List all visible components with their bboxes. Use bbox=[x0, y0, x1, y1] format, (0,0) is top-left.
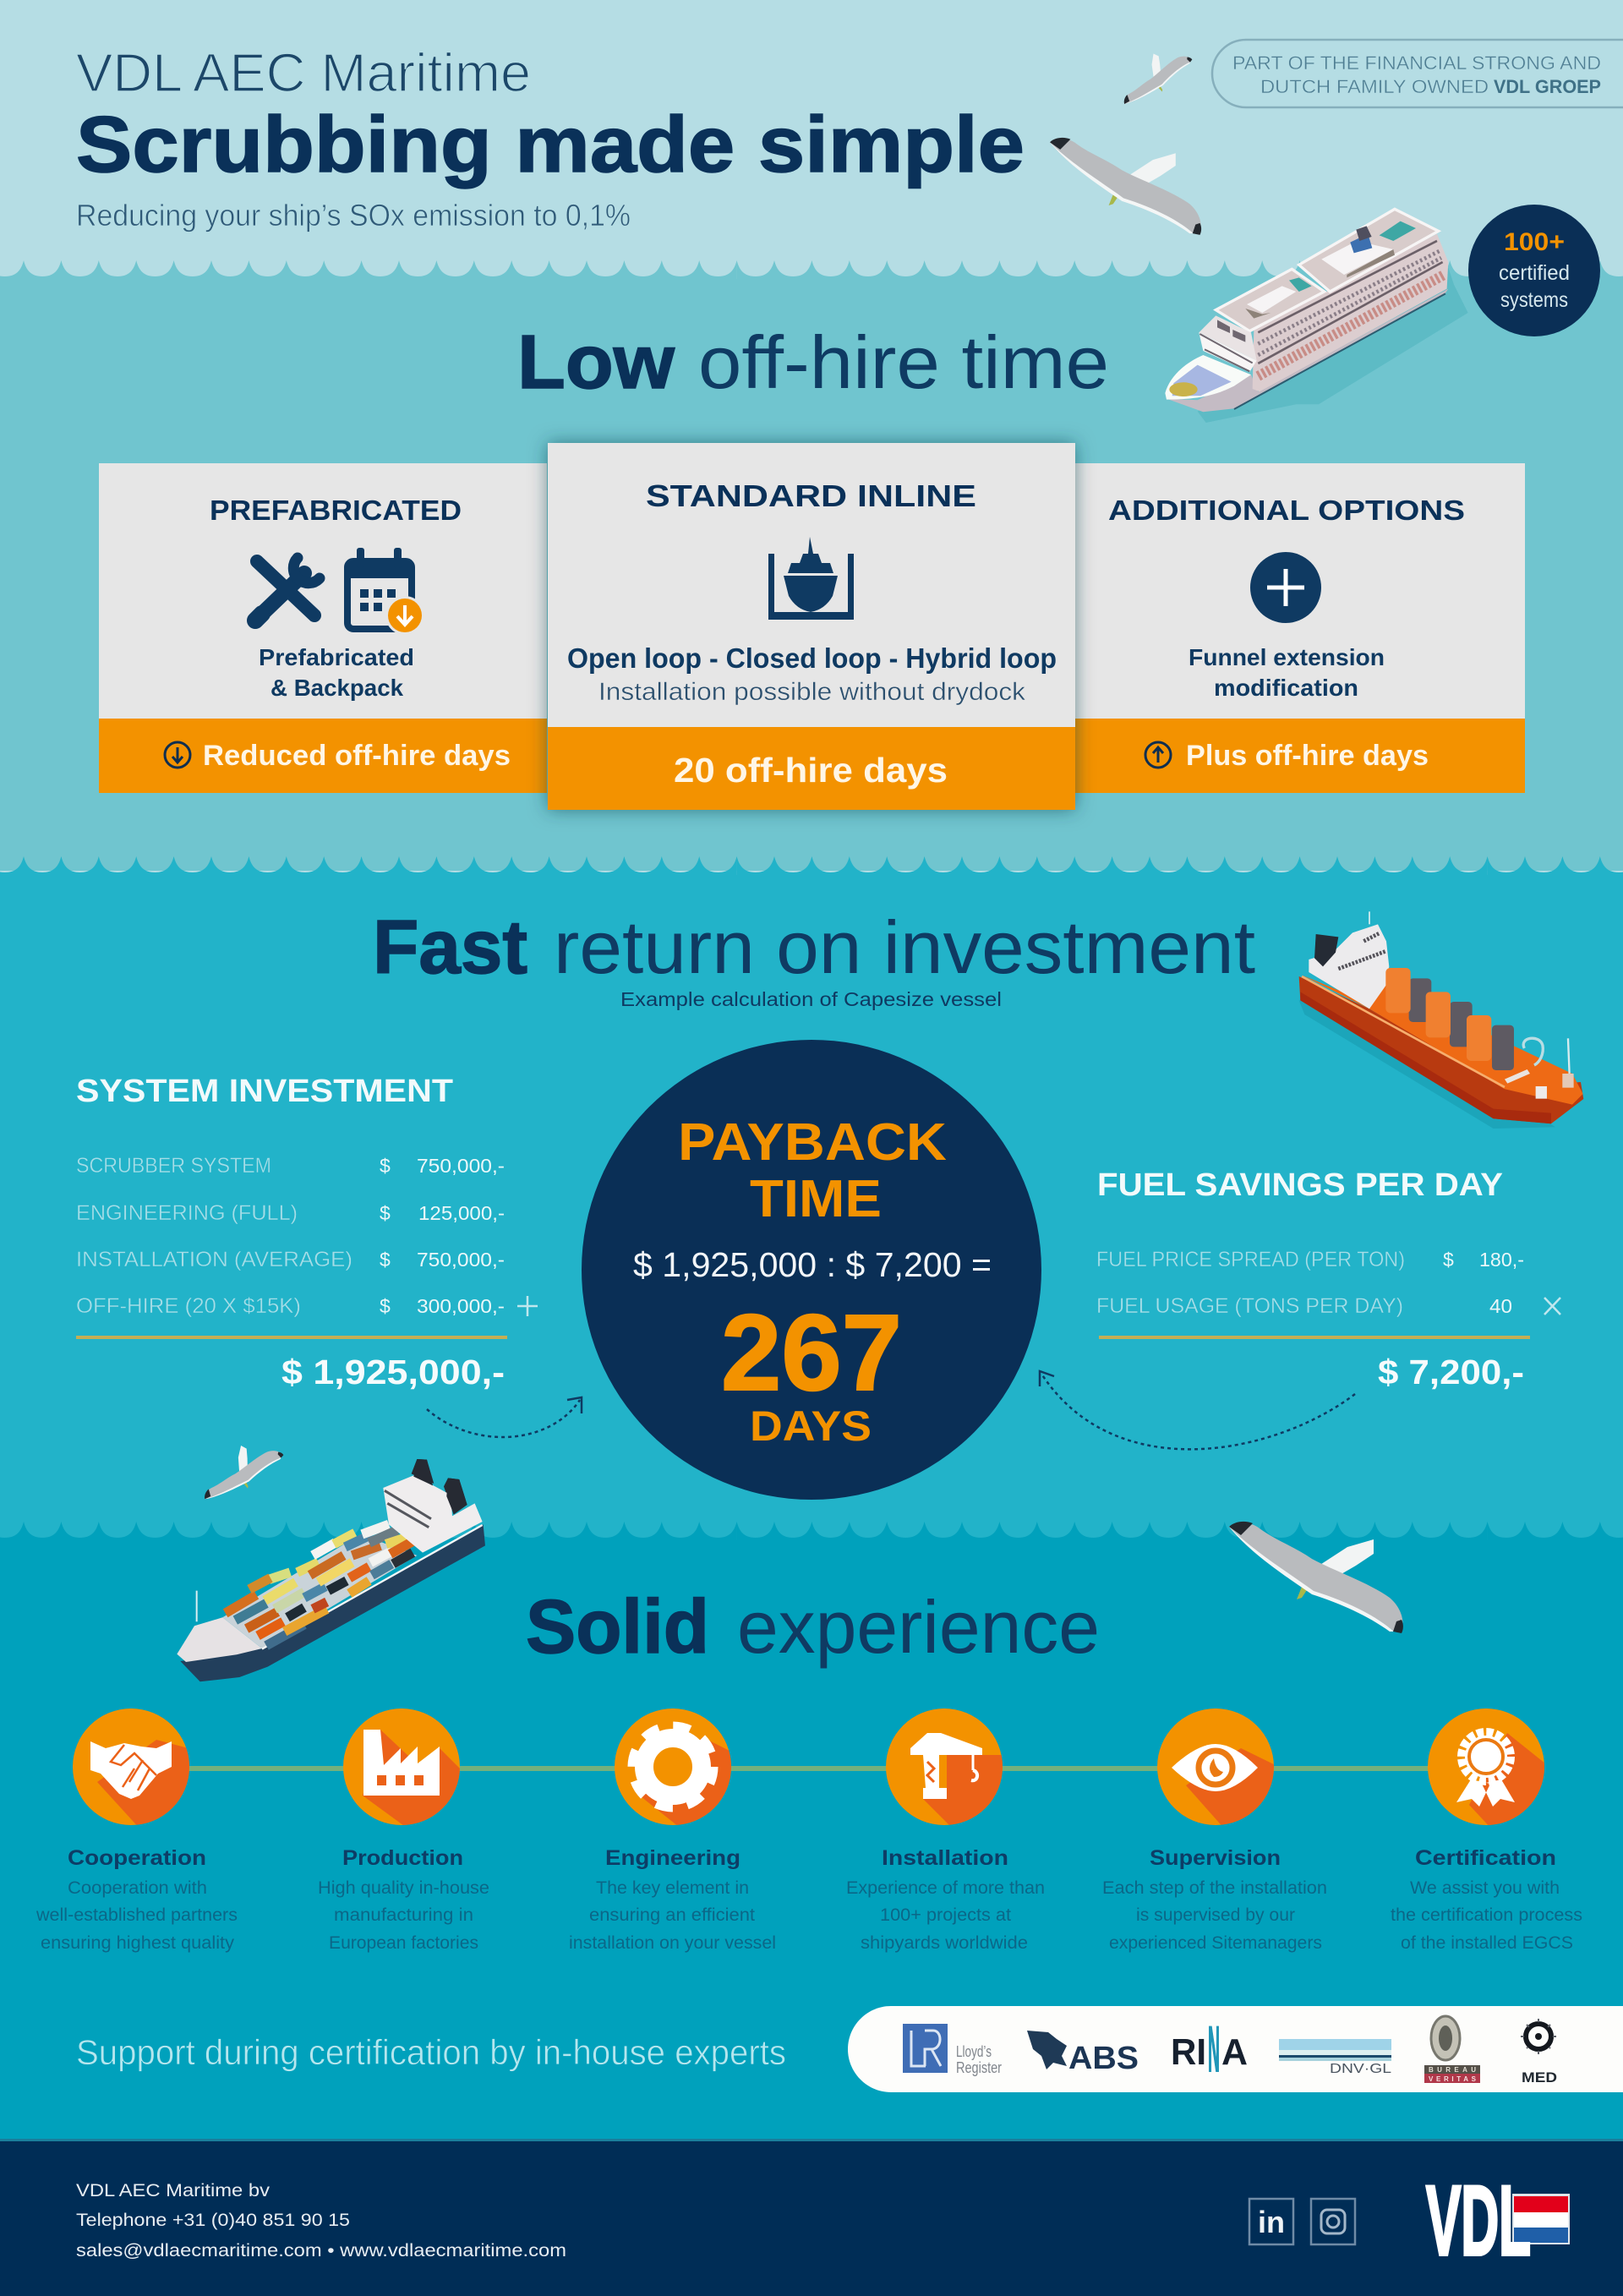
rows: cost values: $ bbox=[380, 1249, 391, 1271]
panel text: funnel extension modification bbox=[1189, 644, 1385, 701]
main title: Scrubbing made simple bbox=[76, 100, 1025, 189]
logo: RINA: RI bbox=[1171, 2031, 1206, 2073]
total: system investment: $ 1,925,000,- bbox=[281, 1353, 505, 1391]
footer contact text bbox=[76, 2181, 566, 2260]
panel heading: prefabricated: PREFABRICATED bbox=[210, 495, 462, 526]
logo: DNV GL: DNV·GL bbox=[1330, 2062, 1391, 2076]
heading: Solid experience: Solid bbox=[526, 1585, 709, 1670]
multiply sign bbox=[1544, 1298, 1560, 1315]
callout pill: part of VDL Groep: PART OF THE FINANCIAL STRONG AND bbox=[1232, 52, 1601, 74]
step title and description bbox=[36, 1846, 238, 1953]
step title and description: Certification bbox=[1415, 1846, 1556, 1870]
step title and description: shipyards worldwide bbox=[861, 1933, 1028, 1953]
rows: cost labels bbox=[76, 1154, 352, 1318]
step: engineering bbox=[569, 1708, 776, 1953]
step title and description: installation on your vessel bbox=[569, 1933, 776, 1953]
label: plus off-hire days: Plus off-hire days bbox=[1186, 740, 1429, 772]
calculation: $ 1,925,000 : $ 7,200 = bbox=[633, 1245, 992, 1284]
logo: Bureau Veritas: BUREAU bbox=[1429, 2066, 1476, 2074]
icon: factory bbox=[343, 1708, 465, 1830]
step title and description: High quality in-house bbox=[318, 1878, 489, 1898]
rows: fuel values bbox=[1443, 1249, 1524, 1317]
payback heading: PAYBACK bbox=[678, 1113, 947, 1172]
illustration: cruise ship bbox=[1165, 209, 1468, 423]
badge: 100+ certified systems: systems bbox=[1500, 288, 1568, 312]
step title and description: Experience of more than bbox=[846, 1878, 1045, 1898]
heading: Fast return on investment: Fast bbox=[373, 905, 527, 990]
arrow: investment to payback bbox=[427, 1397, 582, 1437]
footer bbox=[0, 2139, 1623, 2296]
logo: Bureau Veritas: VERITAS bbox=[1429, 2075, 1477, 2083]
logo: Lloyd's Register bbox=[903, 2024, 1002, 2076]
callout pill: part of VDL Groep: VDL GROEP bbox=[1494, 76, 1601, 97]
result unit: days: DAYS bbox=[750, 1402, 872, 1450]
panel heading: standard inline: STANDARD INLINE bbox=[646, 478, 976, 513]
panel text: installation note: Installation possible without drydock bbox=[598, 678, 1026, 706]
step title and description: Cooperation bbox=[68, 1846, 206, 1870]
footer contact text: sales@vdlaecmaritime.com • www.vdlaecmaritime.com bbox=[76, 2241, 566, 2260]
step title and description: ensuring an efficient bbox=[589, 1905, 755, 1925]
heading: Low off-hire time: off-hire time bbox=[698, 320, 1109, 404]
step: certification bbox=[1391, 1708, 1582, 1953]
rows: fuel labels: FUEL PRICE SPREAD (PER TON) bbox=[1096, 1248, 1405, 1271]
footer contact text: VDL AEC Maritime bv bbox=[76, 2181, 270, 2200]
panel text: funnel extension modification: modification bbox=[1214, 675, 1358, 701]
heading: Low off-hire time bbox=[517, 320, 1109, 405]
panel: prefabricated bbox=[99, 463, 547, 793]
logo: Lloyd's Register: Lloyd’s bbox=[956, 2043, 992, 2060]
rows: cost values: $ bbox=[380, 1295, 391, 1317]
step: installation bbox=[846, 1708, 1045, 1953]
panel: fuel savings table bbox=[1096, 1167, 1560, 1391]
icon: small seagull lower left bbox=[203, 1430, 284, 1522]
step title and description: Each step of the installation bbox=[1102, 1878, 1327, 1898]
step title and description: of the installed EGCS bbox=[1401, 1933, 1573, 1953]
heading: Fast return on investment: return on investment bbox=[554, 905, 1255, 989]
rows: cost values: 300,000,- bbox=[417, 1295, 505, 1317]
rows: cost labels: INSTALLATION (AVERAGE) bbox=[76, 1248, 352, 1271]
footer contact text: Telephone +31 (0)40 851 90 15 bbox=[76, 2211, 350, 2230]
step title and description: Production bbox=[342, 1846, 463, 1870]
rows: fuel values: 40 bbox=[1489, 1295, 1512, 1317]
process connector line bbox=[131, 1766, 1486, 1771]
heading: Solid experience: experience bbox=[737, 1585, 1100, 1669]
panel: standard inline bbox=[548, 443, 1075, 810]
panel text: prefabricated and backpack bbox=[259, 644, 414, 701]
rows: cost values: 125,000,- bbox=[418, 1202, 505, 1224]
step: production bbox=[318, 1708, 489, 1953]
logo: Bureau Veritas bbox=[1424, 2016, 1480, 2083]
icon: down arrow circle bbox=[165, 742, 190, 768]
icon: up arrow circle bbox=[1145, 742, 1171, 768]
company name: VDL AEC Maritime bbox=[76, 42, 531, 103]
rows: cost labels: OFF-HIRE (20 X $15K) bbox=[76, 1294, 301, 1318]
rows: fuel values: $ bbox=[1443, 1249, 1454, 1271]
label: 20 off-hire days: 20 off-hire days bbox=[674, 751, 948, 790]
step title and description: European factories bbox=[329, 1933, 478, 1953]
panel text: prefabricated and backpack: Prefabricated bbox=[259, 644, 414, 670]
header title block bbox=[76, 42, 1025, 232]
icon: large seagull top bbox=[1050, 138, 1201, 235]
logo: RINA: N bbox=[1208, 2014, 1220, 2086]
step title and description: The key element in bbox=[596, 1878, 749, 1898]
heading: Low off-hire time: Low bbox=[517, 320, 675, 405]
icon: large seagull lower right bbox=[1229, 1522, 1403, 1633]
icon: crane bbox=[886, 1708, 1008, 1830]
icon: eye bbox=[1157, 1708, 1279, 1830]
result: 267: 267 bbox=[721, 1293, 902, 1413]
step title and description bbox=[1391, 1846, 1582, 1953]
illustration: tanker ship bbox=[1299, 911, 1583, 1129]
panel heading: system investment: SYSTEM INVESTMENT bbox=[76, 1074, 453, 1109]
icon: ship in drydock bbox=[768, 537, 854, 620]
callout pill: part of VDL Groep bbox=[1212, 40, 1623, 107]
background: second water band with scalloped waves bbox=[0, 856, 1623, 1543]
logo: MED wheel mark bbox=[1521, 2019, 1557, 2086]
step title and description: is supervised by our bbox=[1136, 1905, 1295, 1925]
rows: cost values: 750,000,- bbox=[417, 1249, 505, 1271]
panel text: loop types: Open loop - Closed loop - Hybrid loop bbox=[567, 642, 1057, 674]
text: support during certification: Support during certification by in-house experts bbox=[76, 2032, 786, 2072]
icon: small seagull top bbox=[1123, 40, 1193, 122]
badge: 100+ certified systems: certified bbox=[1499, 261, 1570, 285]
rows: cost values: 750,000,- bbox=[417, 1155, 505, 1177]
illustration: container ship bbox=[177, 1459, 485, 1681]
step: supervision bbox=[1102, 1708, 1327, 1953]
rows: cost values: $ bbox=[380, 1155, 391, 1177]
rows: cost labels: SCRUBBER SYSTEM bbox=[76, 1154, 271, 1178]
panel heading: additional options: ADDITIONAL OPTIONS bbox=[1108, 495, 1465, 526]
icon: linkedin: in bbox=[1258, 2205, 1285, 2239]
rows: fuel labels bbox=[1096, 1248, 1405, 1318]
logo: RINA bbox=[1171, 2014, 1248, 2086]
icon: handshake bbox=[73, 1708, 194, 1830]
step title and description: well-established partners bbox=[36, 1905, 238, 1925]
rows: cost values: $ bbox=[380, 1202, 391, 1224]
badge: 100+ certified systems bbox=[1468, 205, 1600, 336]
logo: DNV GL bbox=[1279, 2039, 1391, 2076]
payback heading: TIME bbox=[750, 1170, 882, 1228]
icon: instagram bbox=[1311, 2199, 1355, 2244]
badge: payback time circle bbox=[582, 1040, 1041, 1500]
subheading: example calculation: Example calculation of Capesize vessel bbox=[620, 988, 1002, 1010]
step title and description: manufacturing in bbox=[334, 1905, 473, 1925]
payback heading bbox=[678, 1113, 947, 1228]
heading: Solid experience bbox=[526, 1585, 1100, 1670]
badge: 100+ certified systems: 100+ bbox=[1504, 228, 1565, 256]
step title and description: the certification process bbox=[1391, 1905, 1582, 1925]
panel: additional options bbox=[1075, 463, 1525, 793]
step title and description bbox=[846, 1846, 1045, 1953]
rows: cost labels: ENGINEERING (FULL) bbox=[76, 1201, 298, 1225]
plus sign bbox=[517, 1296, 538, 1316]
step title and description bbox=[569, 1846, 776, 1953]
icon: gear bbox=[615, 1708, 736, 1830]
step title and description: Engineering bbox=[605, 1846, 740, 1870]
background: first water band with scalloped waves bbox=[0, 260, 1623, 871]
step title and description: We assist you with bbox=[1410, 1878, 1560, 1898]
icon: rosette bbox=[1428, 1708, 1549, 1830]
logo: MED wheel mark: MED bbox=[1522, 2069, 1557, 2086]
step title and description: experienced Sitemanagers bbox=[1109, 1933, 1322, 1953]
logo: ABS bbox=[1027, 2031, 1139, 2076]
step title and description bbox=[1102, 1846, 1327, 1953]
rows: fuel values: 180,- bbox=[1479, 1249, 1524, 1271]
rows: cost values bbox=[380, 1155, 505, 1317]
logo: Lloyd's Register: Register bbox=[956, 2059, 1002, 2076]
step title and description: Installation bbox=[882, 1846, 1008, 1870]
background: third water band with scalloped waves bbox=[0, 1522, 1623, 2142]
total: fuel savings: $ 7,200,- bbox=[1378, 1353, 1524, 1391]
logo: RINA: A bbox=[1221, 2031, 1248, 2073]
panel: system investment table bbox=[76, 1074, 538, 1391]
step title and description: 100+ projects at bbox=[880, 1905, 1011, 1925]
panel text: funnel extension modification: Funnel extension bbox=[1189, 644, 1385, 670]
arrow: fuel savings to payback bbox=[1040, 1371, 1355, 1449]
step title and description: ensuring highest quality bbox=[41, 1933, 235, 1953]
icon: linkedin bbox=[1249, 2199, 1293, 2244]
step title and description bbox=[318, 1846, 489, 1953]
panel: certification logos bbox=[848, 2006, 1623, 2092]
panel text: prefabricated and backpack: & Backpack bbox=[270, 675, 403, 701]
rows: fuel labels: FUEL USAGE (TONS PER DAY) bbox=[1096, 1294, 1403, 1318]
panel heading: fuel savings per day: FUEL SAVINGS PER DAY bbox=[1097, 1167, 1503, 1203]
label: reduced off-hire days: Reduced off-hire days bbox=[203, 740, 511, 772]
logo: ABS: ABS bbox=[1068, 2041, 1139, 2076]
logo: VDL with flag: VDL bbox=[1426, 2165, 1531, 2276]
callout pill: part of VDL Groep: DUTCH FAMILY OWNED bbox=[1260, 76, 1489, 97]
step: cooperation bbox=[36, 1708, 238, 1953]
step title and description: Cooperation with bbox=[68, 1878, 207, 1898]
icon: plus circle bbox=[1250, 552, 1321, 623]
step title and description: Supervision bbox=[1150, 1846, 1281, 1870]
background: sky band bbox=[0, 0, 1623, 287]
icon: wrench and screwdriver bbox=[255, 558, 320, 620]
icon: calendar with down arrow bbox=[347, 548, 424, 635]
subtitle: Reducing your ship’s SOx emission to 0,1% bbox=[76, 198, 631, 232]
